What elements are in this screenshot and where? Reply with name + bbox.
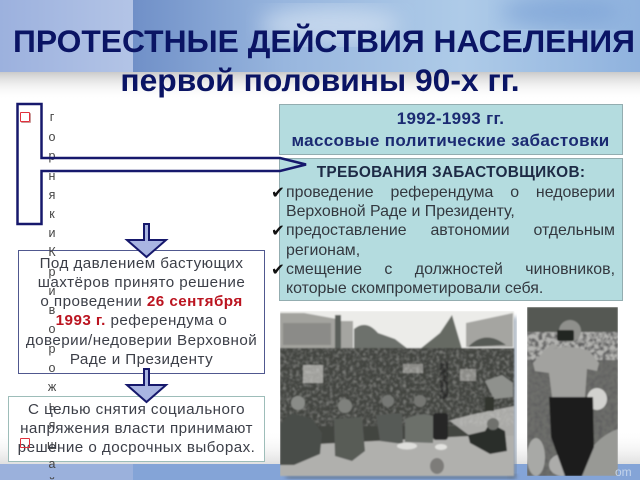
watermark fragment: om (615, 465, 632, 479)
referendum text: Под давлением бастующих (40, 255, 243, 272)
vertical bullet text: р (49, 265, 55, 279)
vertical bullet text: в (49, 303, 55, 317)
vertical bullet text: о (49, 130, 55, 144)
referendum text: о проведении 26 сентября (40, 293, 243, 310)
vertical bullet text: н (49, 169, 55, 183)
panel: mass political strikes: массовые политические забастовки (291, 131, 610, 150)
photo: crowd of miners on square (280, 311, 518, 480)
icon: red square bullet top (20, 112, 30, 122)
panel: strikers' demands (279, 158, 623, 301)
panel: early elections decision (8, 396, 265, 462)
vertical bullet text: ь (49, 399, 55, 413)
vertical bullet text (47, 110, 57, 480)
vertical bullet text: о (49, 322, 55, 336)
arrow: large outline arrow from bullet to demands (16, 102, 306, 226)
panel: mass political strikes: 1992-1993 гг. (397, 109, 504, 128)
demands list: ✔ (271, 183, 285, 202)
demands list: смещение с должностей чиновников, (286, 261, 615, 278)
photo: shirtless miner with megaphone (527, 307, 618, 476)
vertical bullet text: и (48, 226, 55, 240)
referendum text (26, 255, 257, 368)
vertical bullet text: к (49, 207, 55, 221)
arrow: down to referendum box (124, 223, 169, 258)
vertical bullet text: и (48, 284, 55, 298)
vertical bullet text: я (49, 418, 55, 432)
demands list: регионам, (286, 242, 360, 259)
referendum text: 1993 г. референдума о (56, 312, 227, 329)
vertical bullet text: К (48, 245, 56, 259)
vertical bullet text: р (49, 149, 55, 163)
vertical bullet text: о (49, 361, 55, 375)
demands list: предоставление автономии отдельным (286, 222, 615, 239)
icon: red square bullet bottom (20, 438, 30, 448)
arrow: down to early elections box (124, 368, 169, 404)
referendum text: доверии/недоверии Верховной (26, 332, 257, 349)
vertical bullet text: ш (47, 438, 57, 452)
demands list: ✔ (271, 260, 285, 279)
early elections text: напряжения власти принимают (20, 420, 253, 437)
vertical bullet text: я (49, 188, 55, 202)
demands list: которые скомпрометировали себя. (286, 280, 543, 297)
panel: referendum decision (18, 250, 265, 374)
demands list: проведение референдума о недоверии (286, 184, 615, 201)
early elections text: решение о досрочных выборах. (18, 439, 255, 456)
demands list (271, 183, 615, 297)
vertical bullet text: р (49, 342, 55, 356)
vertical bullet text: ж (48, 380, 56, 394)
early elections text: С целью снятия социального (28, 401, 245, 418)
referendum text: шахтёров принято решение (38, 274, 245, 291)
title: ПРОТЕСТНЫЕ ДЕЙСТВИЯ НАСЕЛЕНИЯ (13, 23, 635, 59)
early elections text (18, 401, 255, 456)
title: первой половины 90-х гг. (120, 62, 520, 98)
panel: mass political strikes (279, 104, 623, 155)
vertical bullet text: г (50, 110, 54, 124)
demands list: Верховной Раде и Президенту, (286, 203, 515, 220)
title (13, 23, 635, 98)
referendum text: Раде и Президенту (70, 351, 213, 368)
vertical bullet text: а (49, 457, 55, 471)
demands heading: ТРЕБОВАНИЯ ЗАБАСТОВЩИКОВ: (317, 164, 585, 181)
demands list: ✔ (271, 221, 285, 240)
